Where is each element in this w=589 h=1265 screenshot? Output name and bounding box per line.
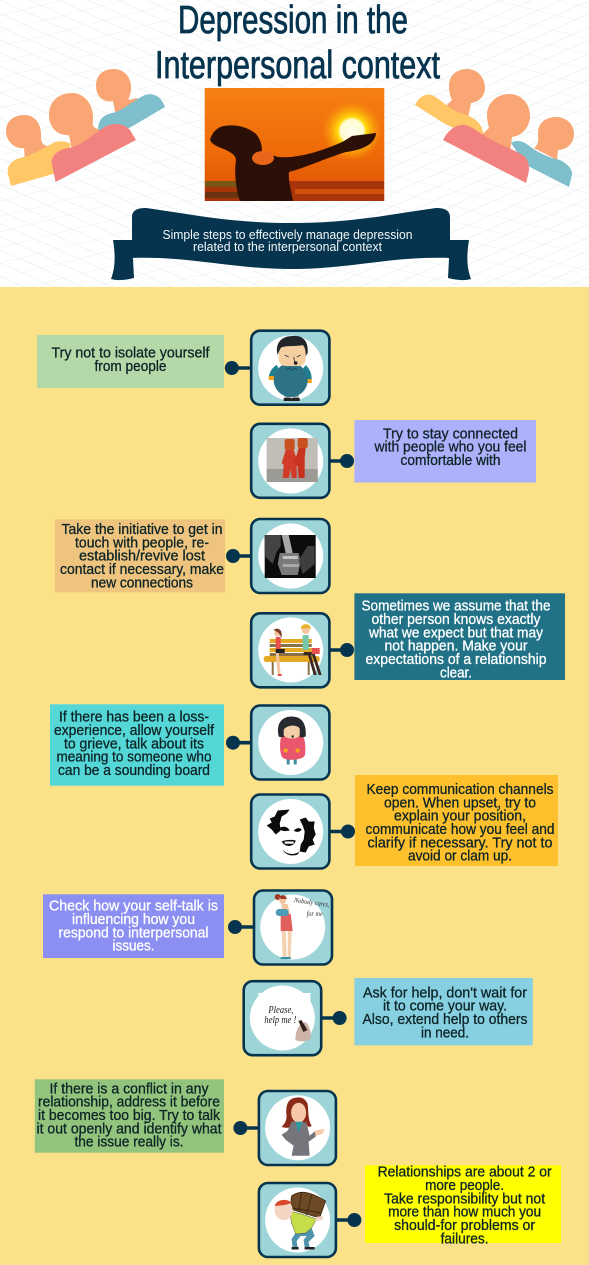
icon: businesswoman [282,1097,325,1156]
yellow steps background [0,287,589,1265]
title [155,0,440,87]
title: Depression in the [178,0,408,42]
step 6 text: avoid or clam up. [408,849,512,865]
step 10 text: Take responsibility but not [384,1191,545,1207]
title: Interpersonal context [155,44,440,87]
step 5 text: experience, allow yourself [54,723,215,739]
icon: hands on phone photo [265,535,316,578]
step 7: self-talk [43,890,332,964]
step 2 text: with people who you feel [374,440,526,456]
step 5 text: meaning to someone who [56,750,212,766]
header background [0,0,589,287]
step 3: take the initiative [55,519,329,593]
step 9 text [36,1081,222,1151]
people illustration: left [6,69,165,186]
icon: two people on bench [264,624,322,676]
icon: woman with speech note: for me [307,910,323,918]
step 1 text: Try not to isolate yourself [52,346,210,362]
icon: woman with speech note: Nobody cares, [293,896,330,909]
step 10 text: Relationships are about 2 or [378,1165,552,1181]
step 10: responsibility [259,1165,561,1257]
icon: please help me note: help me ! [264,1015,296,1026]
step 7 text [49,899,218,955]
step 7 text: Check how your self-talk is [49,899,218,915]
step 10 text: failures. [441,1231,489,1247]
step 3 text: establish/revive lost [79,549,205,565]
step 6 text [366,782,554,865]
step 8 text: it to come your way. [383,999,507,1015]
step 7 text: issues. [112,939,154,955]
icon: please help me note [258,993,311,1041]
step 2 text: Try to stay connected [383,426,518,442]
step 9 text: relationship, address it before [38,1095,220,1111]
step 4 text: Sometimes we assume that the [362,599,550,615]
step 6 text: explain your position, [394,809,526,825]
icon: please help me note: Please, [268,1005,293,1016]
step 4 text: what we expect but that may [368,625,544,641]
step 7 text: influencing how you [72,912,195,928]
banner [111,208,471,280]
step 4 text: clear. [440,665,472,681]
step 8 text: in need. [421,1025,469,1041]
step 1: try not to isolate [37,331,329,405]
step 3 text: contact if necessary, make [60,562,224,578]
step 5 text: to grieve, talk about its [64,736,204,752]
step 8 text [362,985,528,1041]
step 6 text: open. When upset, try to [384,795,536,811]
step 6 text: clarify if necessary. Try not to [368,835,552,851]
step 1 text [52,346,210,375]
step 6: communication [251,775,558,868]
step 10 text: more people. [425,1178,504,1194]
banner text: related to the interpersonal context [193,240,383,254]
icon: sad girl [278,716,306,764]
step 10 text: more than how much you [388,1205,541,1221]
step 5: grieve [50,704,329,786]
step 9 text: it out openly and identify what [36,1121,222,1137]
banner text [162,228,413,254]
icon: woman with speech note [275,894,330,959]
icon: two red figures photo [267,438,318,482]
step 10 text [378,1165,552,1247]
step 4 text: other person knows exactly [372,612,541,628]
icon: stencil portrait [267,810,316,855]
step 10 text: should-for problems or [394,1218,535,1234]
step 3 text: new connections [91,575,193,591]
step 4 text: not happen. Make your [384,639,528,655]
step 4: expectations [251,593,565,687]
step 5 text [54,710,215,779]
step 4 text: expectations of a relationship [366,652,546,668]
step 9: conflict [35,1079,336,1165]
banner text: Simple steps to effectively manage depression [162,228,413,242]
step 7 text: respond to interpersonal [58,925,208,941]
step 2 text: comfortable with [400,453,500,469]
photo: silhouette against sunset [205,88,384,201]
step 6 text: communicate how you feel and [366,822,554,838]
step 8: ask for help [244,978,533,1055]
step 3 text: Take the initiative to get in [62,522,222,538]
step 3 text [60,522,224,591]
step 8 text: Also, extend help to others [362,1012,528,1028]
step 9 text: the issue really is. [74,1135,184,1151]
icon: man carrying trunk [275,1192,326,1250]
step 9 text: If there is a conflict in any [50,1081,209,1097]
step 2: stay connected [251,420,536,498]
step 6 text: Keep communication channels [366,782,554,798]
step 2 text [374,426,526,469]
step 3 text: touch with people, re- [75,535,209,551]
step 9 text: it becomes too big. Try to talk [38,1108,221,1124]
icon: sad man [269,336,312,401]
step 4 text [362,599,550,681]
people illustration: right [415,69,574,187]
step 5 text: can be a sounding board [58,763,210,779]
step 8 text: Ask for help, don't wait for [363,985,527,1001]
step 5 text: If there has been a loss- [59,710,209,726]
step 1 text: from people [94,359,166,375]
